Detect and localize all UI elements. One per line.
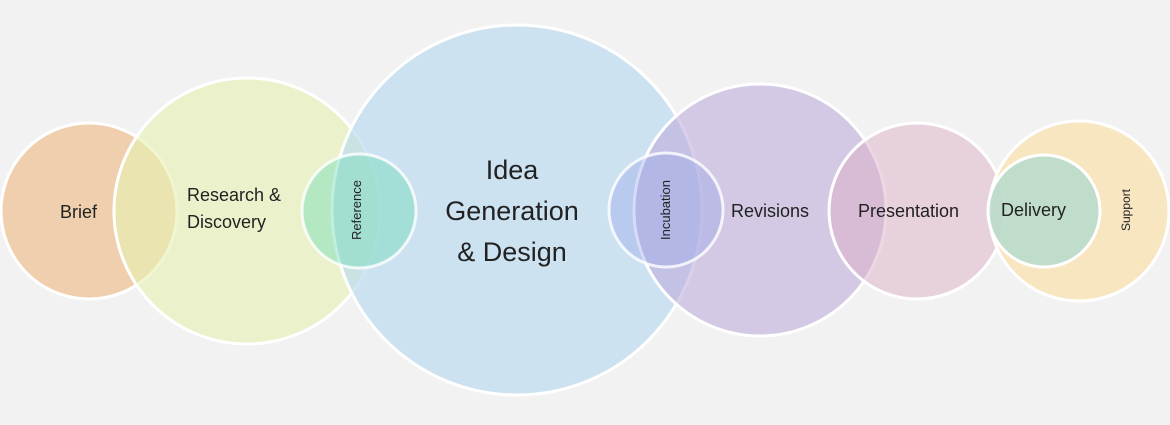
circle: Incubation [609,153,723,267]
label: Idea Generation & Design: & Design [457,237,567,267]
label: Support: Support [1119,188,1133,231]
label: Incubation: Incubation [658,180,673,240]
circle: Support [989,121,1169,301]
circle: Research & Discovery [114,78,380,344]
label: Revisions: Revisions [731,201,809,221]
circle: Revisions [634,84,886,336]
label: Reference: Reference [349,180,364,240]
label: Idea Generation & Design: Idea [486,155,539,185]
circle: Delivery [988,155,1100,267]
circle: Reference [302,154,416,268]
circle: Brief [1,123,177,299]
label: Idea Generation & Design: Generation [445,196,579,226]
label: Brief: Brief [60,202,98,222]
label: Presentation: Presentation [858,201,959,221]
label: Delivery: Delivery [1001,200,1066,220]
label: Research & Discovery: Discovery [187,212,266,232]
circle: Presentation [829,123,1005,299]
circle: Idea Generation & Design [332,25,702,395]
label: Research & Discovery: Research & [187,185,281,205]
